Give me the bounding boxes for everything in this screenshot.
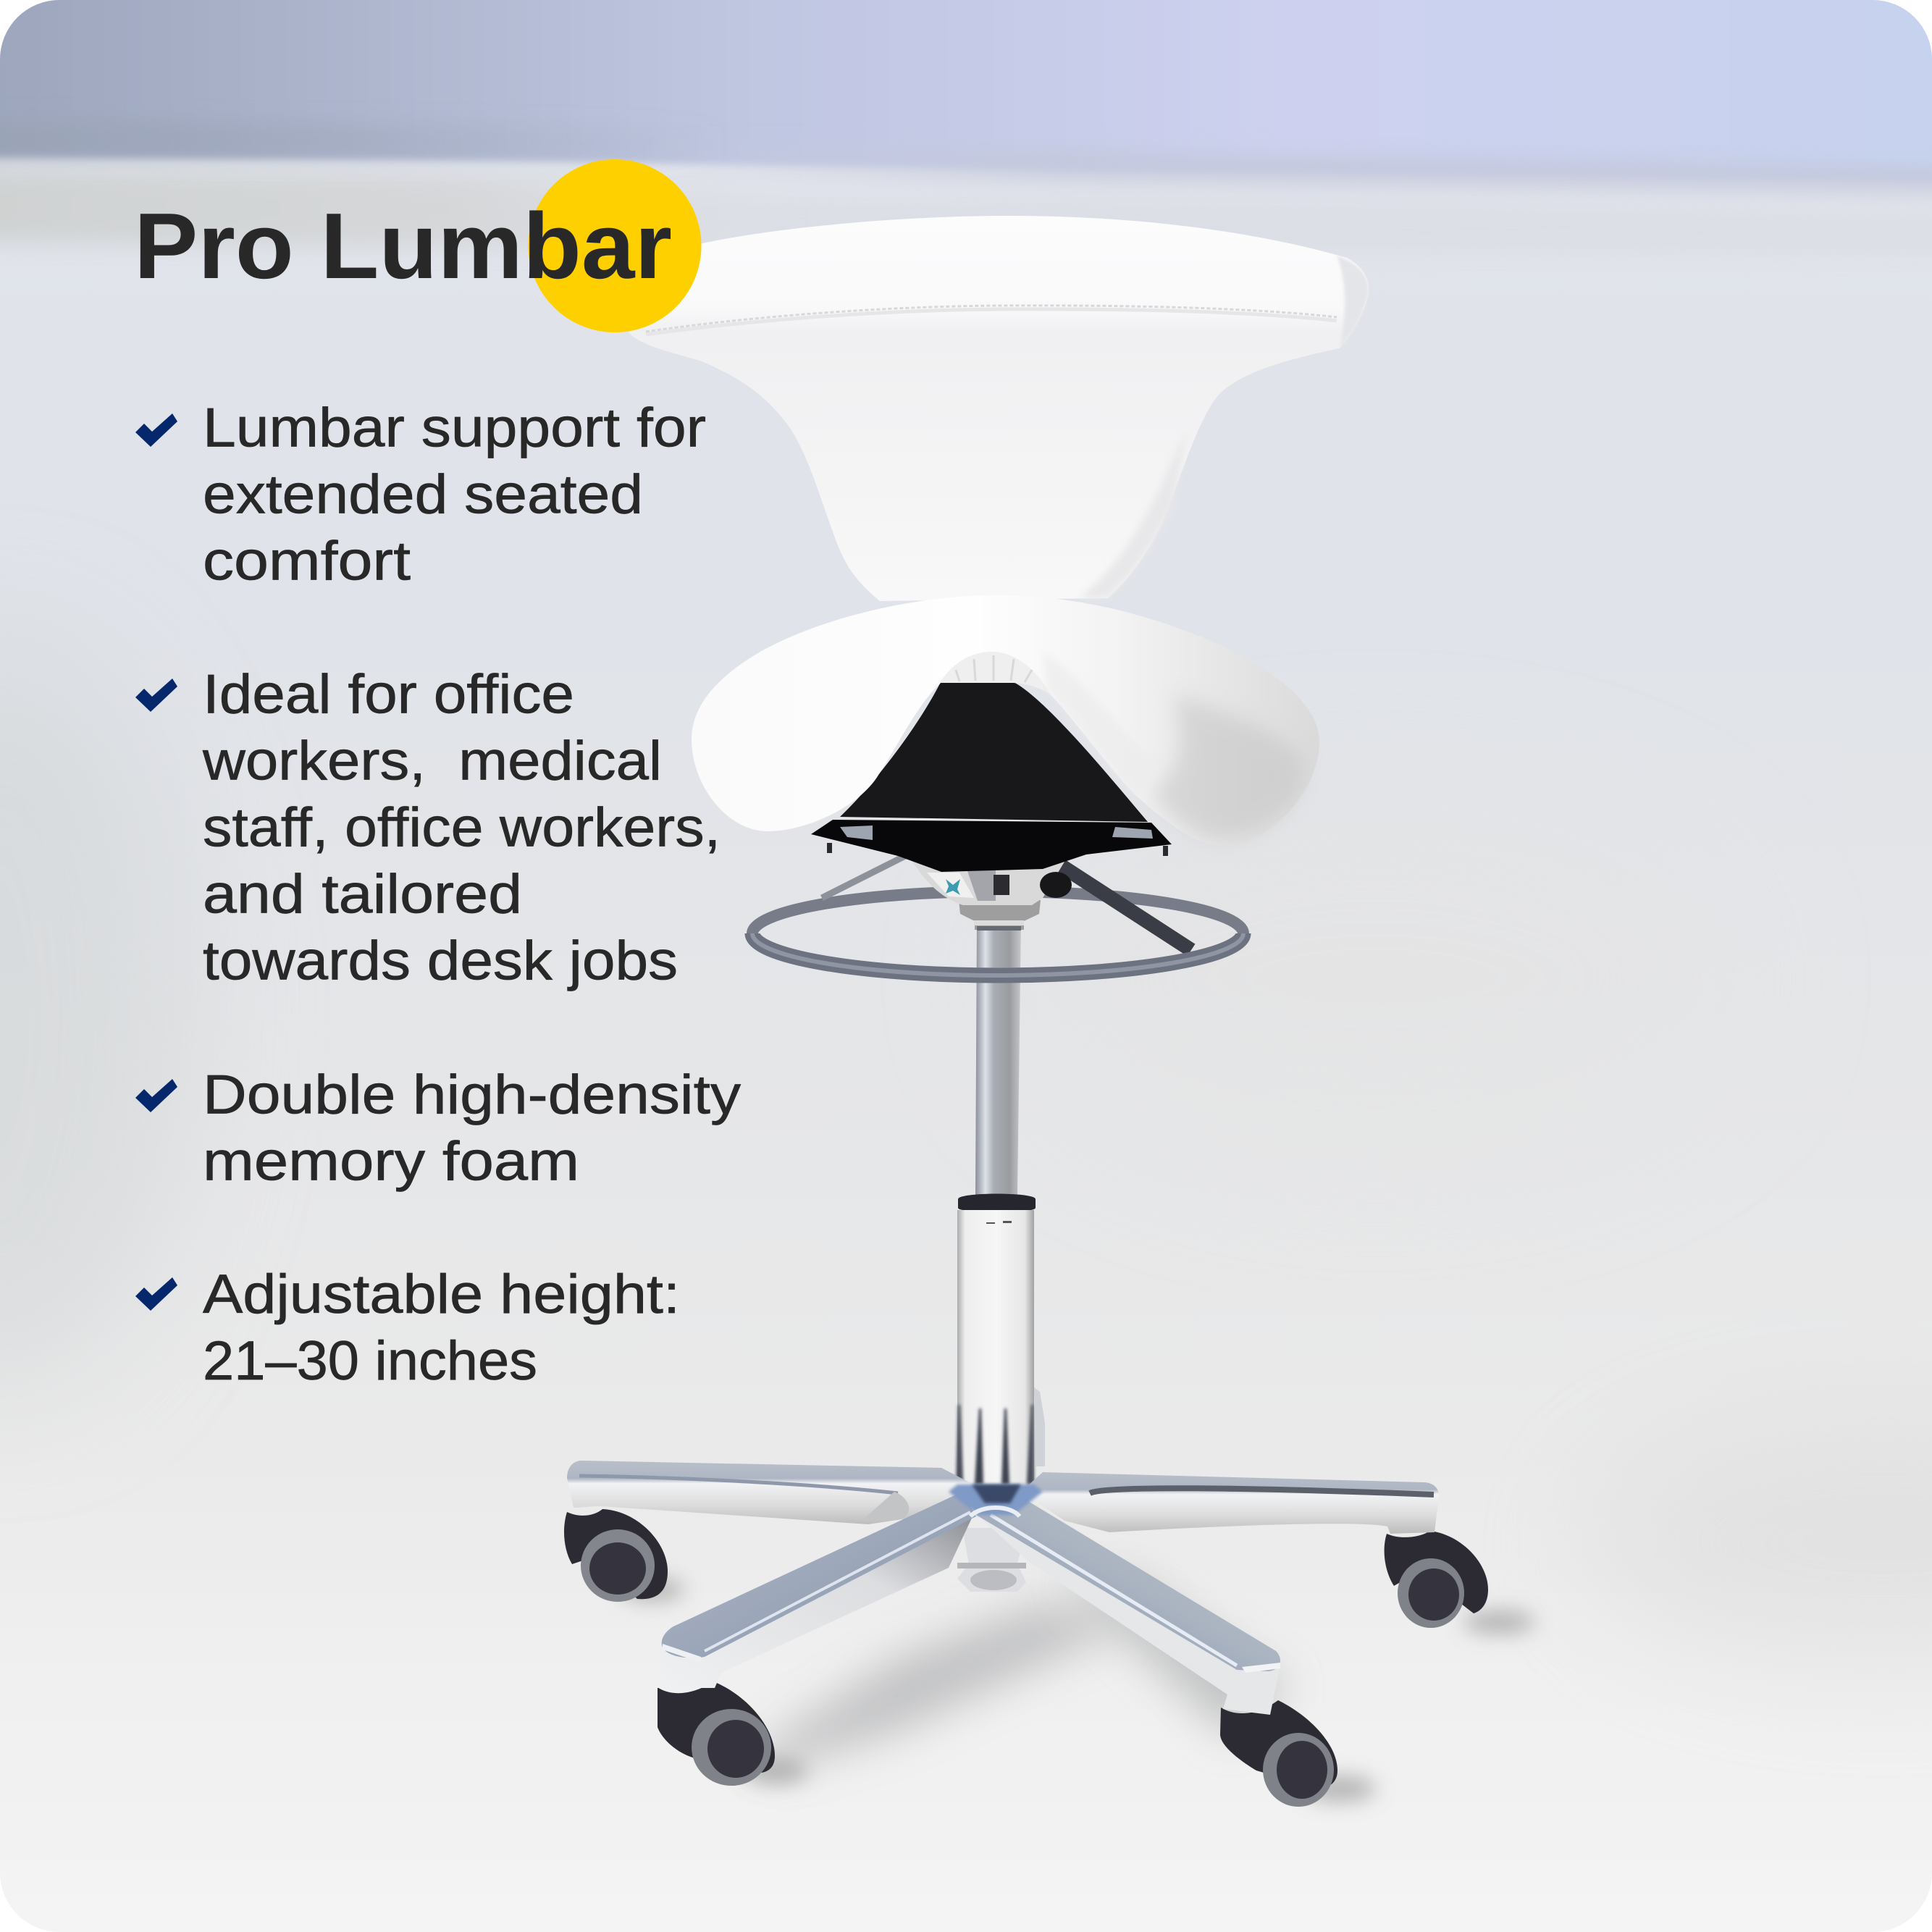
base arm front right (975, 1492, 1282, 1715)
gas cylinder cap (958, 1193, 1036, 1212)
feature text (203, 1064, 741, 1192)
title: Pro Lumbar (134, 194, 672, 298)
right dark strut (1057, 863, 1191, 950)
chrome centre foot (957, 1528, 1026, 1592)
chair product illustration (564, 216, 1488, 1807)
caster front right (1220, 1700, 1337, 1807)
black seat underside (840, 681, 1148, 822)
feature: lumbar support (135, 397, 706, 592)
feature text: comfort (203, 530, 411, 592)
feature text: workers, medical (202, 730, 662, 792)
feature text: staff, office workers, (203, 797, 721, 859)
feature: ideal for office workers (135, 663, 721, 992)
feature text: towards desk jobs (203, 930, 678, 992)
backrest (629, 216, 1369, 601)
caster front left (658, 1681, 775, 1786)
seat mechanism cone (912, 862, 1072, 905)
feature text (203, 1264, 680, 1392)
base arm front left (658, 1492, 976, 1688)
base arm back right (1021, 1472, 1439, 1534)
feature: adjustable height (135, 1264, 680, 1392)
black mounting plate (811, 820, 1172, 872)
feature text: Ideal for office (203, 663, 574, 726)
collar (959, 900, 1041, 931)
post (975, 920, 1021, 1195)
back ring of footrest (752, 891, 1243, 933)
feature text (203, 397, 706, 592)
seat cushion (692, 595, 1319, 846)
caster back left (564, 1509, 668, 1602)
check icon (135, 413, 177, 447)
feature text: 21–30 inches (203, 1330, 537, 1392)
feature text: Adjustable height: (203, 1264, 680, 1325)
left strut (822, 856, 905, 898)
feature text: Double high-density (203, 1064, 741, 1125)
floor shadows under base (619, 1578, 1535, 1802)
feature: memory foam (135, 1064, 741, 1192)
feature text: and tailored (203, 863, 522, 925)
front ring of footrest (752, 933, 1243, 975)
feature list (135, 397, 741, 1392)
feature text: Lumbar support for (203, 397, 706, 459)
check icon (135, 679, 177, 712)
yellow circle accent (529, 159, 701, 332)
hub (949, 1484, 1043, 1516)
chrome cylinder (956, 1210, 1034, 1487)
feature text: memory foam (203, 1131, 579, 1192)
check icon (135, 1079, 177, 1112)
check icon (135, 1277, 177, 1311)
feature text: extended seated (203, 463, 643, 526)
feature text (202, 663, 721, 992)
height lever (1034, 1387, 1045, 1466)
base arm back left (567, 1461, 985, 1524)
caster back right (1385, 1531, 1488, 1628)
